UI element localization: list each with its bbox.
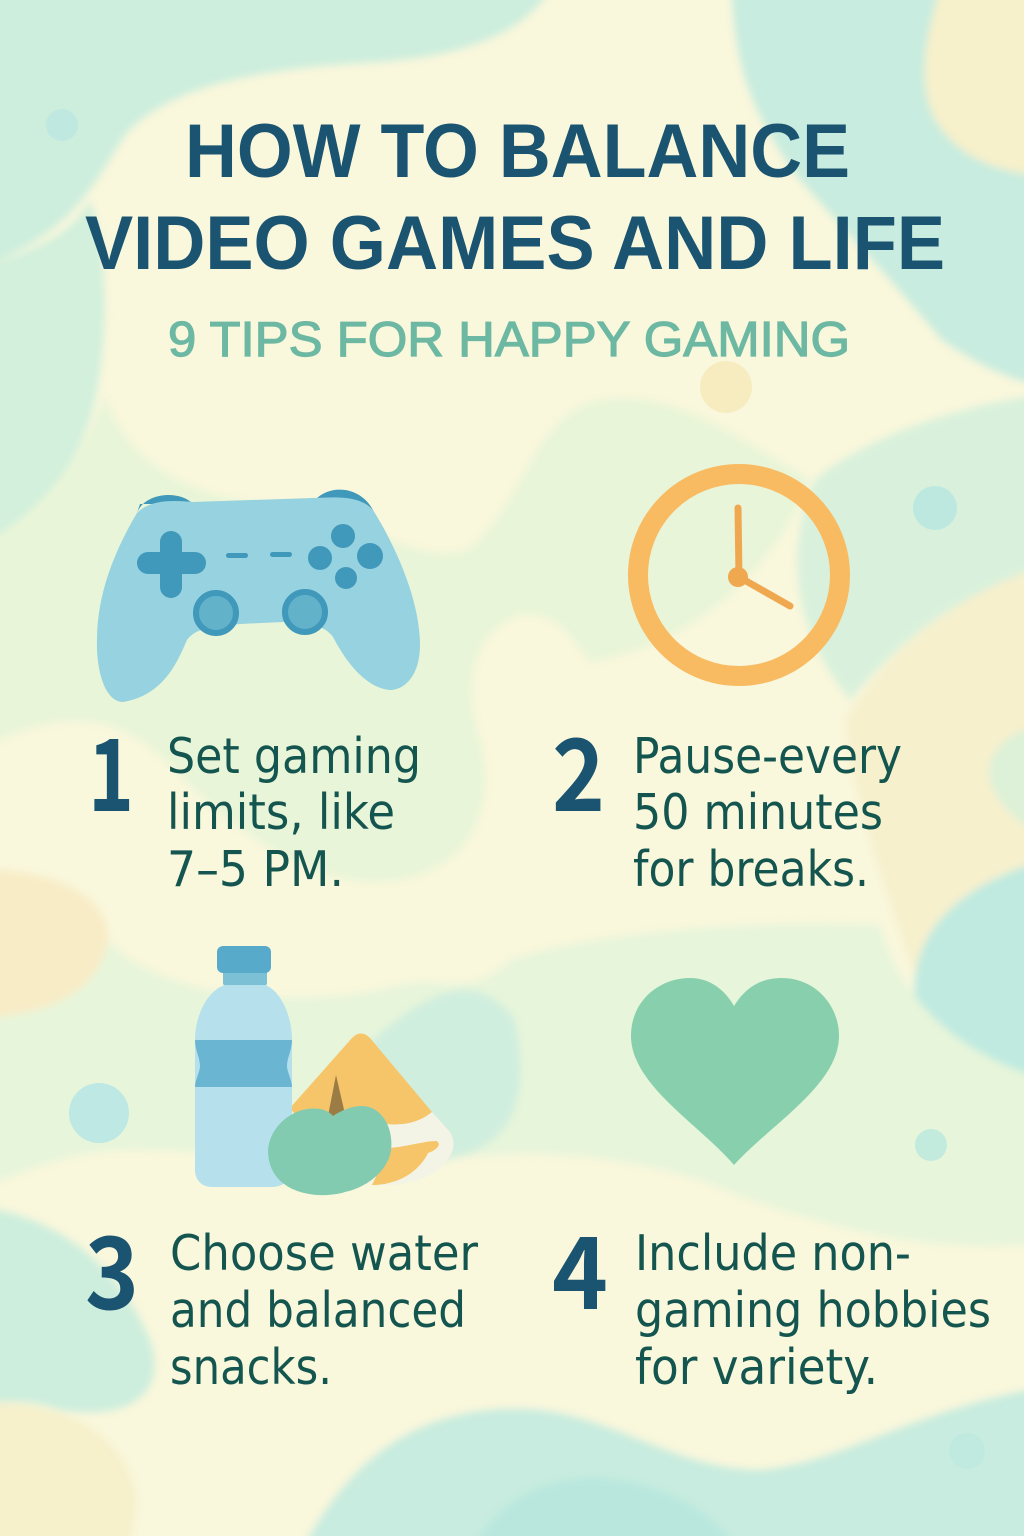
tip 3 — [85, 1193, 479, 1396]
icon: game controller — [97, 490, 420, 702]
tip 4: Include non- — [635, 1225, 911, 1282]
tip 3: 3 — [85, 1193, 139, 1338]
tip 1: Set gaming — [167, 728, 421, 785]
title — [85, 109, 945, 286]
tip 1: limits, like — [167, 784, 395, 841]
icon: clock — [638, 474, 840, 676]
tip 4: 4 — [552, 1193, 608, 1338]
tip 3: snacks. — [170, 1339, 332, 1396]
tip 3: and balanced — [170, 1282, 466, 1339]
tip 2: Pause-every — [633, 728, 902, 785]
tip 1: 7–5 PM. — [167, 841, 344, 898]
tip 4 — [552, 1193, 991, 1396]
tip 3: Choose water — [170, 1225, 479, 1282]
icon: heart — [631, 978, 839, 1165]
title: HOW TO BALANCE — [185, 109, 850, 194]
tip 2: 2 — [552, 695, 605, 840]
tip 1: 1 — [88, 695, 134, 840]
tip 2: 50 minutes — [633, 784, 883, 841]
tip 1 — [88, 695, 421, 898]
subtitle: 9 TIPS FOR HAPPY GAMING — [168, 313, 850, 367]
tip 2 — [552, 695, 902, 898]
tip 2: for breaks. — [633, 841, 869, 898]
tip 4: gaming hobbies — [635, 1282, 991, 1339]
icon: water bottle and snacks — [195, 946, 454, 1195]
title: VIDEO GAMES AND LIFE — [85, 201, 945, 286]
tip 4: for variety. — [635, 1339, 878, 1396]
